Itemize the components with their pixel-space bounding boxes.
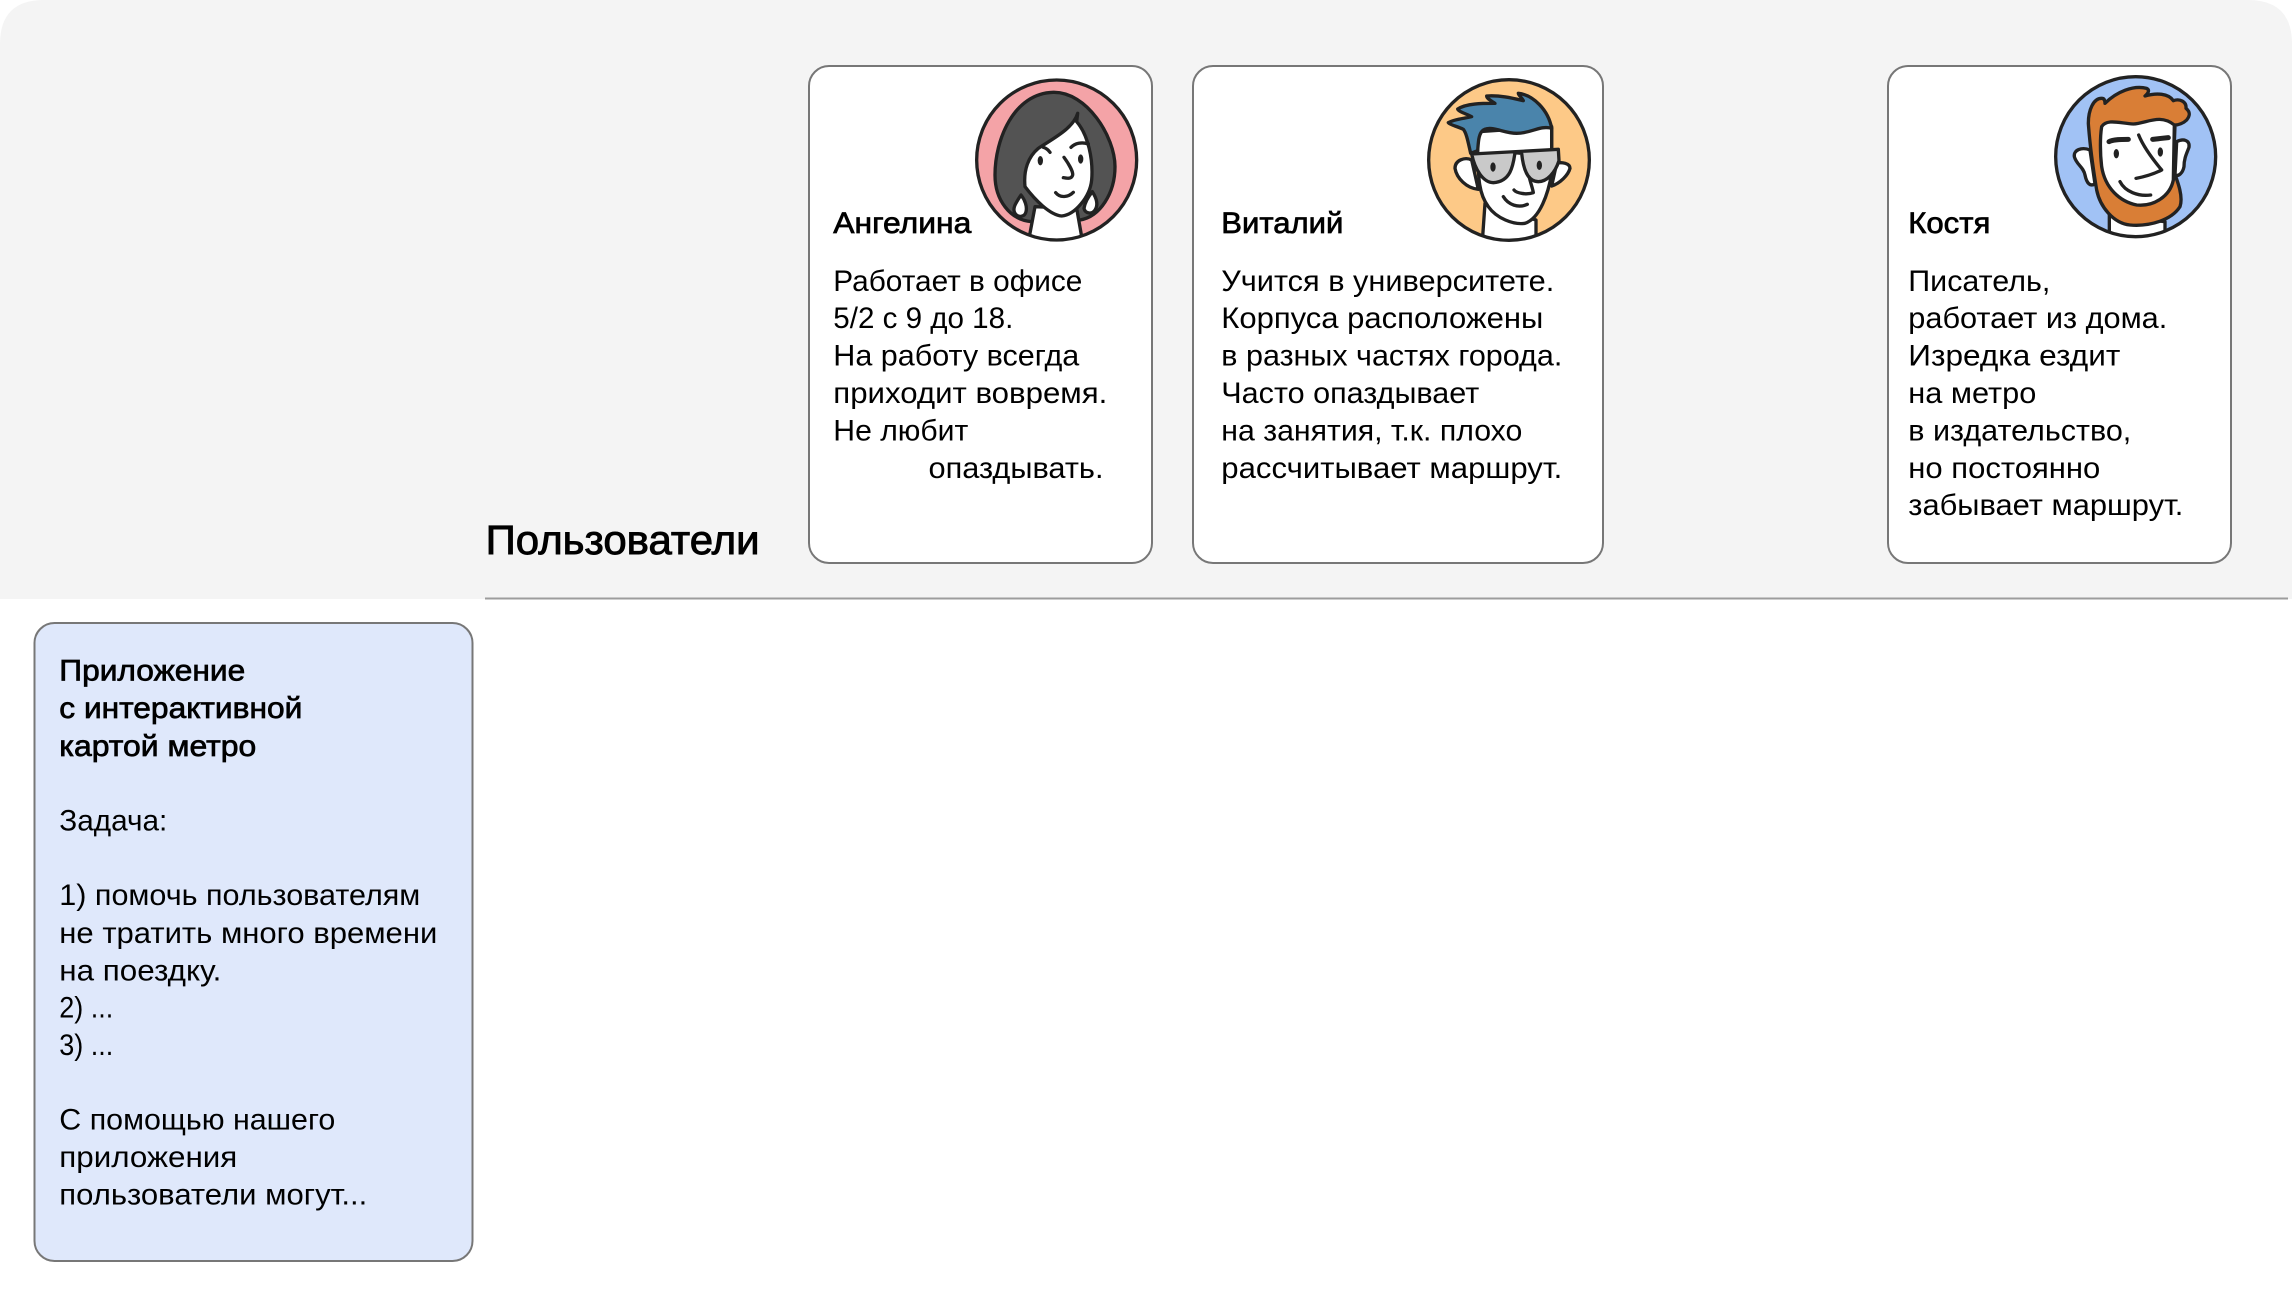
text block: Kostya description: в издательство,: [1908, 415, 2131, 447]
text block: task list: 3) ...: [59, 1030, 113, 1062]
text block: Vitaly description: Часто опаздывает: [1221, 378, 1479, 410]
text block: Angelina description: опаздывать.: [928, 453, 1104, 485]
text block: Kostya description: но постоянно: [1908, 453, 2100, 485]
name: Vitaly: Виталий: [1221, 208, 1343, 240]
text block: outcome: [59, 1105, 367, 1211]
heading: app title: Приложение: [59, 655, 245, 687]
text block: Angelina description: приходит вовремя.: [833, 378, 1107, 410]
panel: user card Vitaly: [1193, 66, 1603, 563]
text block: task list: на поездку.: [59, 955, 221, 987]
text block: task list: Задача:: [59, 806, 167, 838]
text block: Angelina description: Работает в офисе: [833, 266, 1082, 298]
text block: Vitaly description: Корпуса расположены: [1221, 303, 1543, 335]
text block: outcome: С помощью нашего: [59, 1105, 335, 1137]
icon: Angelina avatar: [977, 80, 1137, 242]
heading: app title: картой метро: [59, 731, 256, 763]
heading: app title: [59, 655, 302, 763]
panel: user card Kostya: [1888, 66, 2231, 563]
text block: Vitaly description: в разных частях города.: [1221, 341, 1562, 373]
text block: task list: 1) помочь пользователям: [59, 880, 420, 912]
text block: Kostya description: работает из дома.: [1908, 303, 2167, 335]
panel: user card Angelina: [809, 66, 1152, 563]
text block: Kostya description: [1908, 266, 2183, 522]
text block: Angelina description: На работу всегда: [833, 341, 1080, 373]
text block: Vitaly description: на занятия, т.к. плохо: [1221, 415, 1522, 447]
text block: Kostya description: Писатель,: [1908, 266, 2050, 298]
panel: users header background: [0, 0, 2292, 599]
text block: outcome: приложения: [59, 1142, 237, 1174]
text block: Angelina description: Не любит: [833, 415, 968, 447]
heading: users: Пользователи: [486, 517, 760, 563]
text block: Kostya description: на метро: [1908, 378, 2036, 410]
heading: app title: с интерактивной: [59, 693, 302, 725]
text block: task list: 2) ...: [59, 993, 113, 1025]
text block: Kostya description: забывает маршрут.: [1908, 490, 2183, 522]
name: Kostya: Костя: [1908, 208, 1990, 240]
text block: Vitaly description: Учится в университете.: [1221, 266, 1554, 298]
text block: Kostya description: Изредка ездит: [1908, 341, 2120, 373]
text block: outcome: пользователи могут...: [59, 1179, 367, 1211]
text block: task list: [59, 806, 437, 1062]
text block: task list: не тратить много времени: [59, 918, 437, 950]
text block: Angelina description: 5/2 с 9 до 18.: [833, 303, 1013, 335]
name: Angelina: Ангелина: [833, 208, 972, 240]
icon: Vitaly avatar: [1429, 80, 1589, 242]
text block: Vitaly description: [1221, 266, 1562, 485]
panel: product description: [34, 623, 472, 1261]
text block: Angelina description: [833, 266, 1107, 485]
text block: Vitaly description: рассчитывает маршрут.: [1221, 453, 1562, 485]
icon: Kostya avatar: [2056, 77, 2216, 242]
